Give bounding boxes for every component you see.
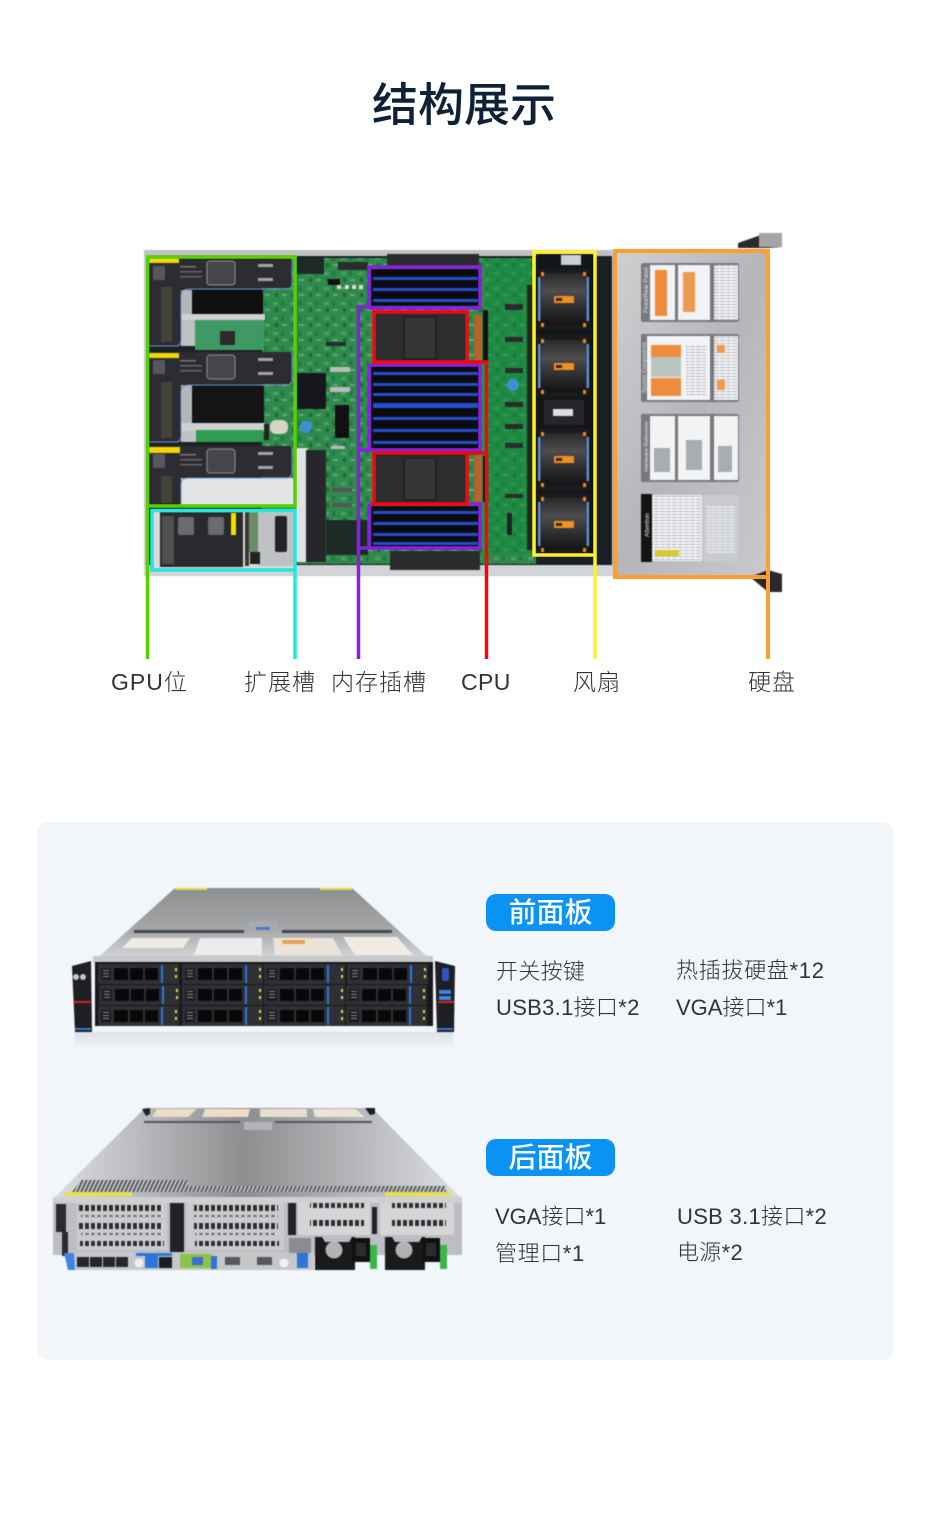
PCIe slots: middle group — [186, 1203, 284, 1250]
rear vents — [65, 1180, 451, 1196]
title: 结构展示 — [372, 79, 556, 131]
rear spec: VGA: VGA接口*1 — [495, 1204, 606, 1229]
left ear with power buttons — [72, 961, 92, 1032]
top cover — [55, 1108, 460, 1197]
heading: front panel — [486, 894, 615, 931]
rear spec: management port: 管理口*1 — [495, 1241, 585, 1266]
rail handles — [738, 233, 782, 592]
top cover — [93, 888, 433, 963]
hard drive top cover with service labels — [616, 251, 768, 578]
front spec: power button: 开关按键 — [496, 959, 585, 984]
label row 3 — [641, 414, 739, 482]
shroud: GPU bays — [149, 258, 295, 505]
memory slots — [371, 269, 479, 548]
label row 1: Front/Rear Panel — [644, 267, 650, 313]
rear spec: USB: USB 3.1接口*2 — [677, 1204, 827, 1229]
label row 2 — [641, 334, 739, 402]
label: CPU: CPU — [461, 669, 511, 695]
panel: front and rear views — [37, 822, 894, 1360]
I/O row — [64, 1238, 314, 1270]
callout frame: expansion slots (cyan) — [152, 510, 295, 659]
heading: rear panel — [486, 1139, 615, 1176]
label row 3: Hardware Reference — [644, 421, 650, 472]
callout frame: GPU slots (green) — [148, 257, 295, 659]
PCIe slots: left group — [77, 1203, 167, 1250]
label: expansion slot: 扩展槽 — [244, 669, 316, 695]
black dividers — [170, 1203, 377, 1257]
drive bays — [95, 962, 433, 1026]
callout frame: memory slots (purple) — [358, 267, 480, 659]
callout frame: CPU (red) — [374, 312, 486, 659]
label row 4: attention: Attention — [645, 513, 651, 537]
rear face — [53, 1197, 462, 1256]
front spec: hot-swap drives: 热插拔硬盘*12 — [676, 958, 825, 983]
label: memory slot: 内存插槽 — [331, 669, 427, 695]
expansion slot module — [152, 510, 295, 570]
callout frame: hard drives (orange) — [615, 251, 768, 659]
motherboard — [262, 258, 536, 564]
right riser slots — [298, 1203, 454, 1235]
chassis top-view diagram — [144, 232, 783, 659]
fan modules — [536, 254, 594, 555]
front spec: USB: USB3.1接口*2 — [496, 995, 640, 1020]
chassis body — [144, 250, 616, 576]
label: hard disk: 硬盘 — [748, 669, 796, 695]
label row 2: System Components — [642, 342, 648, 393]
top and bottom CPU brackets — [387, 254, 480, 570]
front server illustration — [71, 887, 456, 1042]
label row 4: attention — [641, 494, 739, 562]
label: fan: 风扇 — [573, 669, 621, 695]
label: GPU: GPU位 — [111, 669, 188, 695]
power supply units — [315, 1237, 447, 1270]
right ear with USB and VGA — [435, 961, 455, 1032]
rear spec: power: 电源*2 — [677, 1240, 743, 1265]
silver bay and black bracket — [296, 448, 326, 562]
heading: rear panel: 后面板 — [508, 1142, 592, 1173]
heading: front panel: 前面板 — [508, 897, 592, 928]
callout frame: fans (yellow) — [534, 252, 595, 659]
floor reflection — [75, 1032, 453, 1048]
front spec: VGA: VGA接口*1 — [676, 995, 787, 1020]
label row 1 — [641, 263, 739, 322]
rear server illustration — [52, 1107, 462, 1271]
CPU sockets — [375, 313, 467, 504]
